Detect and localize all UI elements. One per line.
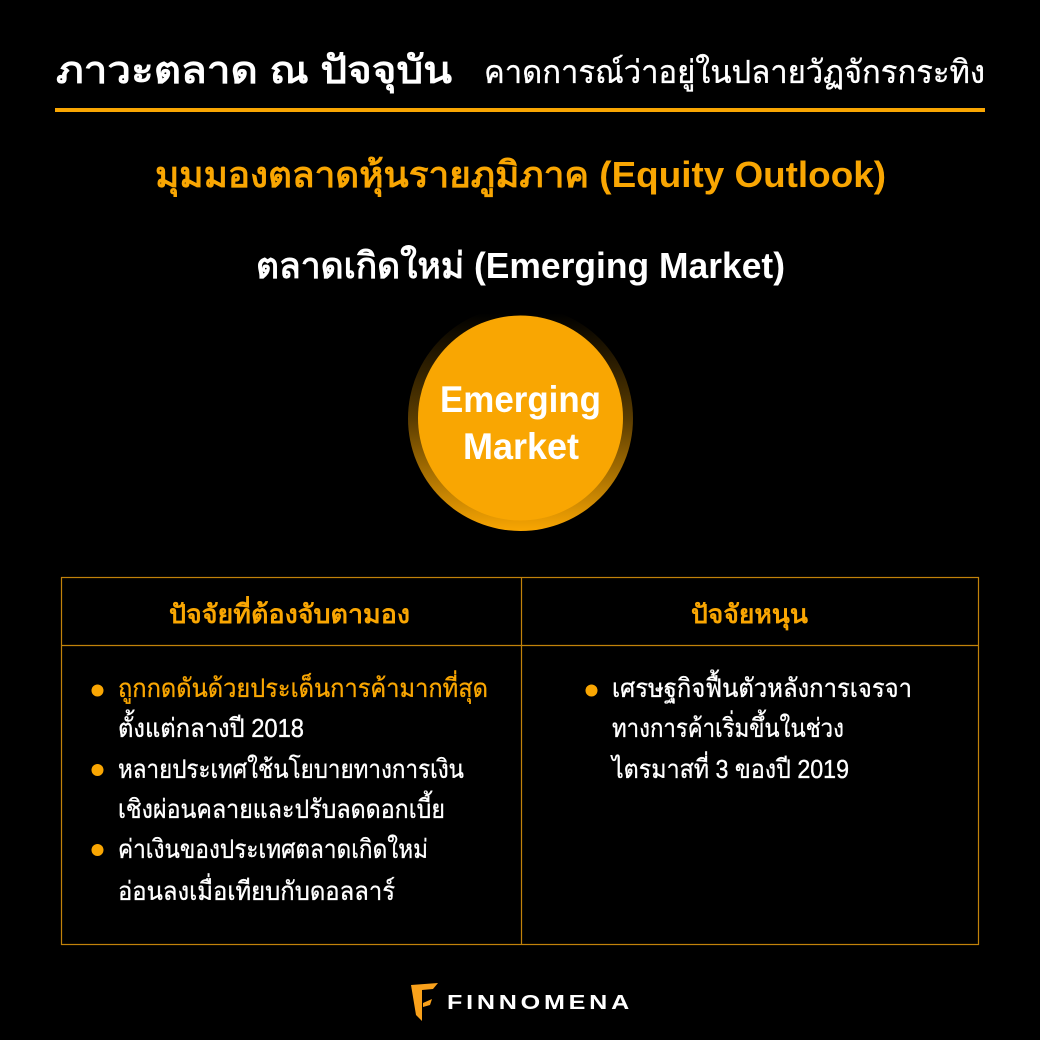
logo: FINNOMENA: FINNOMENA xyxy=(447,992,633,1014)
left column bullets: ค่าเงินของประเทศตลาดเกิดใหม่ xyxy=(118,834,428,864)
subheading: emerging market: ตลาดเกิดใหม่ (Emerging Market) xyxy=(256,244,785,286)
heading: equity outlook: มุมมองตลาดหุ้นรายภูมิภาค (Equity Outlook) xyxy=(155,154,886,198)
column header: watch factors: ปัจจัยที่ต้องจับตามอง xyxy=(169,595,410,629)
left column bullets xyxy=(92,670,488,906)
left column bullets: เชิงผ่อนคลายและปรับลดดอกเบี้ย xyxy=(118,790,445,824)
logo: FINNOMENA xyxy=(411,983,633,1021)
left column bullets: อ่อนลงเมื่อเทียบกับดอลลาร์ xyxy=(118,873,395,906)
factor table xyxy=(62,578,978,944)
emerging market circle: Emerging xyxy=(440,379,601,420)
right column bullet: ไตรมาสที่ 3 ของปี 2019 xyxy=(610,751,849,784)
right column bullet: ทางการค้าเริ่มขึ้นในช่วง xyxy=(612,709,844,743)
title xyxy=(56,50,985,94)
left column bullets: ถูกกดดันด้วยประเด็นการค้ามากที่สุด xyxy=(118,670,488,704)
left column bullets: ตั้งแต่กลางปี 2018 xyxy=(118,709,304,743)
emerging market circle: Market xyxy=(463,426,579,467)
column header: supporting factors: ปัจจัยหนุน xyxy=(691,599,808,631)
title: ภาวะตลาด ณ ปัจจุบัน xyxy=(56,50,452,94)
icon: F mark xyxy=(411,983,438,1021)
emerging market circle xyxy=(408,306,633,531)
right column bullet: เศรษฐกิจฟื้นตัวหลังการเจรจา xyxy=(612,669,912,704)
title: คาดการณ์ว่าอยู่ในปลายวัฏจักรกระทิง xyxy=(484,54,985,92)
left column bullets: หลายประเทศใช้นโยบายทางการเงิน xyxy=(118,754,464,784)
right column bullet xyxy=(586,669,912,784)
title rule xyxy=(55,108,985,112)
